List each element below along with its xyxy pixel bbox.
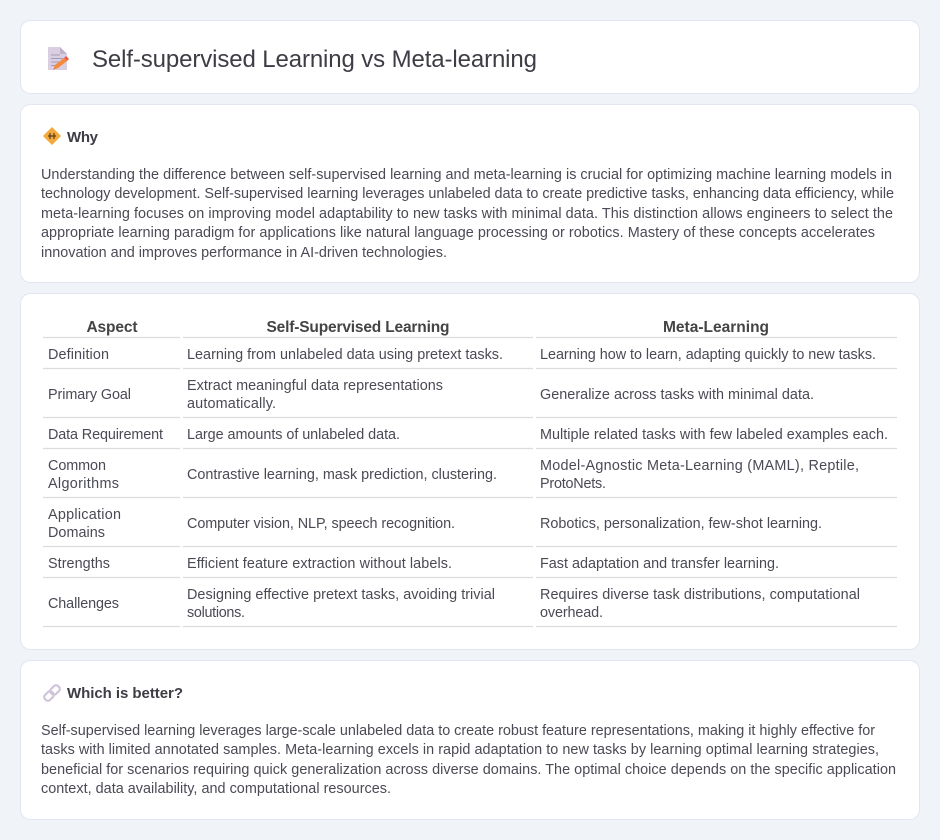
row: common algorithms: Algorithms: [48, 476, 119, 492]
icon: diamond sign: [44, 128, 60, 144]
row: challenges: overhead.: [540, 605, 603, 621]
row: common algorithms: Contrastive learning, mask prediction, clustering.: [187, 467, 497, 483]
row: common algorithms: Model-Agnostic Meta-Learning (MAML), Reptile,: [540, 458, 859, 474]
text block: which is better paragraph: [41, 723, 896, 797]
row: definition: Learning from unlabeled data using pretext tasks.: [187, 347, 503, 363]
row: challenges: Requires diverse task distributions, computational: [540, 587, 860, 603]
text block: why paragraph: [41, 167, 894, 261]
row: application domains: Domains: [48, 525, 105, 541]
text block: why paragraph: Understanding the difference between self-supervised learning and meta-learning is crucial for optimizing machine learning models in: [41, 167, 892, 183]
row: common algorithms: ProtoNets.: [540, 476, 606, 492]
row: application domains: Robotics, personalization, few-shot learning.: [540, 516, 822, 532]
row: strengths: [48, 556, 779, 572]
row: data requirement: Data Requirement: [48, 427, 163, 443]
panel: comparison table: [20, 294, 920, 650]
row: application domains: Computer vision, NLP, speech recognition.: [187, 516, 455, 532]
row: challenges: Challenges: [48, 596, 119, 612]
text block: which is better paragraph: Self-supervised learning leverages large-scale unlabeled data to create robust feature representations, making it highly effective for: [41, 723, 875, 739]
panel: title header: [20, 20, 920, 94]
text block: why paragraph: appropriate learning paradigm for applications like natural language processing or robotics. Mastery of these concepts accelerates: [41, 225, 875, 241]
row: primary goal: Generalize across tasks with minimal data.: [540, 387, 814, 403]
row: definition: Definition: [48, 347, 109, 363]
row: primary goal: Extract meaningful data representations: [187, 378, 443, 394]
row: data requirement: Multiple related tasks with few labeled examples each.: [540, 427, 888, 443]
table header row: Meta-Learning: [663, 319, 769, 336]
row: challenges: [48, 587, 860, 621]
row: challenges: Designing effective pretext tasks, avoiding trivial: [187, 587, 495, 603]
text block: which is better paragraph: context, data availability, and computational resources.: [41, 781, 391, 797]
row: common algorithms: [48, 458, 859, 492]
table header row: Aspect: [86, 319, 138, 336]
text block: why paragraph: technology development. Self-supervised learning leverages unlabeled data to create predictive tasks, enhancing data efficiency, while: [41, 186, 894, 202]
text block: which is better paragraph: tasks with limited annotated samples. Meta-learning excels in rapid adaptation to new tasks by learning optimal learning strategies,: [41, 742, 879, 758]
row: strengths: Strengths: [48, 556, 110, 572]
icon: document with pencil: [48, 47, 69, 70]
row: definition: Learning how to learn, adapting quickly to new tasks.: [540, 347, 876, 363]
row: application domains: Application: [48, 507, 121, 523]
heading: why: Why: [67, 129, 99, 146]
row: common algorithms: Common: [48, 458, 106, 474]
row: application domains: [48, 507, 822, 541]
row: primary goal: [48, 378, 814, 412]
row: primary goal: automatically.: [187, 396, 276, 412]
text block: why paragraph: meta-learning focuses on improving model adaptability to new tasks with minimal data. This distinction allows engineers to select the: [41, 206, 893, 222]
row: data requirement: Large amounts of unlabeled data.: [187, 427, 400, 443]
row: data requirement: [48, 427, 888, 443]
title: Self-supervised Learning vs Meta-learning: [92, 46, 537, 73]
row: strengths: Fast adaptation and transfer learning.: [540, 556, 779, 572]
heading: which is better: Which is better?: [67, 685, 183, 702]
panel: why: [20, 104, 920, 282]
table header row: Self-Supervised Learning: [266, 319, 450, 336]
table header row: [86, 319, 769, 336]
row: challenges: solutions.: [187, 605, 245, 621]
panel: which is better: [20, 660, 920, 820]
icon: chain link: [43, 684, 61, 702]
text block: which is better paragraph: beneficial for scenarios requiring quick generalization across diverse domains. The optimal choice depends on the specific application: [41, 762, 896, 778]
row: definition: [48, 347, 876, 363]
row: primary goal: Primary Goal: [48, 387, 131, 403]
row: strengths: Efficient feature extraction without labels.: [187, 556, 452, 572]
text block: why paragraph: innovation and improves performance in AI-driven technologies.: [41, 245, 447, 261]
